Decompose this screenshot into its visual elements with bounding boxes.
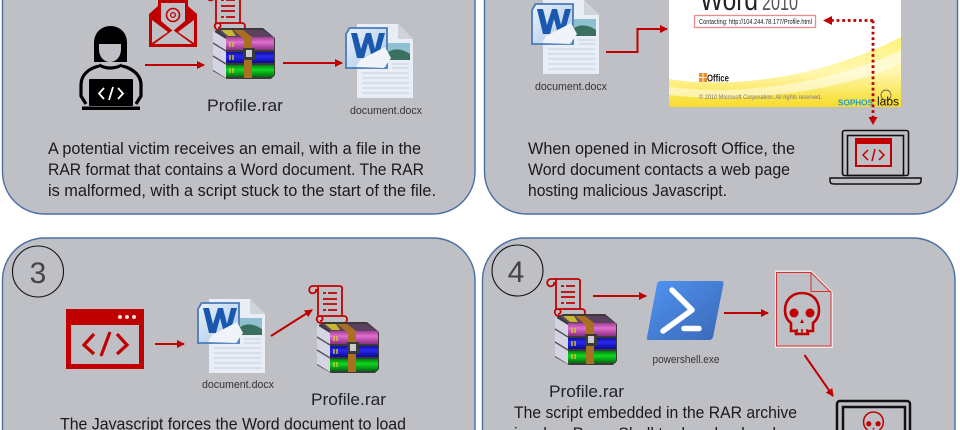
step number 4 — [492, 245, 543, 296]
step number 4: 4 — [508, 256, 524, 289]
logo: Office — [699, 72, 729, 84]
arrow: victim to archive — [145, 64, 204, 66]
panel 4: script invokes PowerShell — [482, 238, 955, 430]
text: step 1 description: is malformed, with a script stuck to the start of the file. — [48, 182, 436, 200]
url box: Contacting: http://104.244.78.177/Profile.html — [699, 19, 812, 26]
text: step 2 description — [528, 140, 795, 200]
icon: RAR archive — [317, 322, 379, 373]
label: Profile.rar: Profile.rar — [207, 96, 283, 115]
panel 1: victim receives email — [2, 0, 475, 214]
label: Profile.rar: Profile.rar — [311, 390, 386, 409]
step number 3 — [12, 246, 64, 297]
text: step 4 description — [514, 404, 797, 430]
logo: SophosLabs: labs — [877, 96, 899, 108]
screenshot: Word 2010 splash — [669, 0, 901, 108]
arrow: dotted link between URL and laptop — [823, 16, 878, 125]
url box — [694, 16, 816, 28]
text: step 1 description: RAR format that contains a Word document. The RAR — [48, 161, 424, 179]
arrow: document to script — [271, 310, 312, 336]
arrow: script to PowerShell — [593, 295, 646, 297]
icon: malicious file — [776, 272, 832, 347]
icon: code window — [66, 309, 144, 369]
text: step 1 description: A potential victim receives an email, with a file in the — [48, 140, 421, 158]
icon: Word document — [532, 0, 599, 74]
label: Profile.rar: Profile.rar — [549, 382, 624, 401]
text: step 1 description — [48, 140, 436, 200]
logo: SophosLabs: SOPHOS — [838, 98, 873, 108]
label: document.docx: document.docx — [535, 81, 607, 93]
label: powershell.exe: powershell.exe — [652, 354, 720, 366]
icon: email envelope — [149, 0, 197, 47]
panel 3: Javascript loads script — [2, 238, 475, 430]
arrow: document to splash — [606, 29, 667, 52]
text: step 2 description: hosting malicious Javascript. — [528, 182, 727, 200]
logo: SophosLabs — [838, 90, 899, 108]
icon: RAR archive — [555, 314, 617, 365]
panel 2: document contacts web page — [484, 0, 958, 214]
text: step 2 description: When opened in Microsoft Office, the — [528, 140, 795, 158]
label: document.docx: document.docx — [350, 105, 422, 117]
icon: script scroll — [309, 286, 347, 323]
icon: laptop with script window — [830, 130, 921, 184]
text: step 4 description: The script embedded in the RAR archive — [514, 404, 797, 422]
icon: Word document — [198, 299, 265, 373]
icon: hacker with laptop — [81, 26, 141, 110]
step number 3: 3 — [30, 257, 46, 290]
icon: script scroll — [547, 279, 585, 316]
arrow: window to document — [155, 343, 184, 345]
arrow: PowerShell to malware file — [724, 312, 768, 314]
icon: Word document — [346, 24, 413, 98]
icon: RAR archive — [213, 28, 275, 79]
logo: Office: Office — [707, 72, 729, 84]
text: step 2 description: Word document contacts a web page — [528, 161, 790, 179]
icon: script scroll — [207, 0, 245, 30]
arrow: file to laptop — [804, 355, 833, 396]
icon: infected laptop — [837, 401, 910, 430]
icon: PowerShell — [647, 281, 724, 340]
label: document.docx: document.docx — [202, 379, 274, 391]
arrow: archive to document — [283, 62, 342, 64]
text: copyright: © 2010 Microsoft Corporation. All rights reserved. — [699, 94, 822, 101]
